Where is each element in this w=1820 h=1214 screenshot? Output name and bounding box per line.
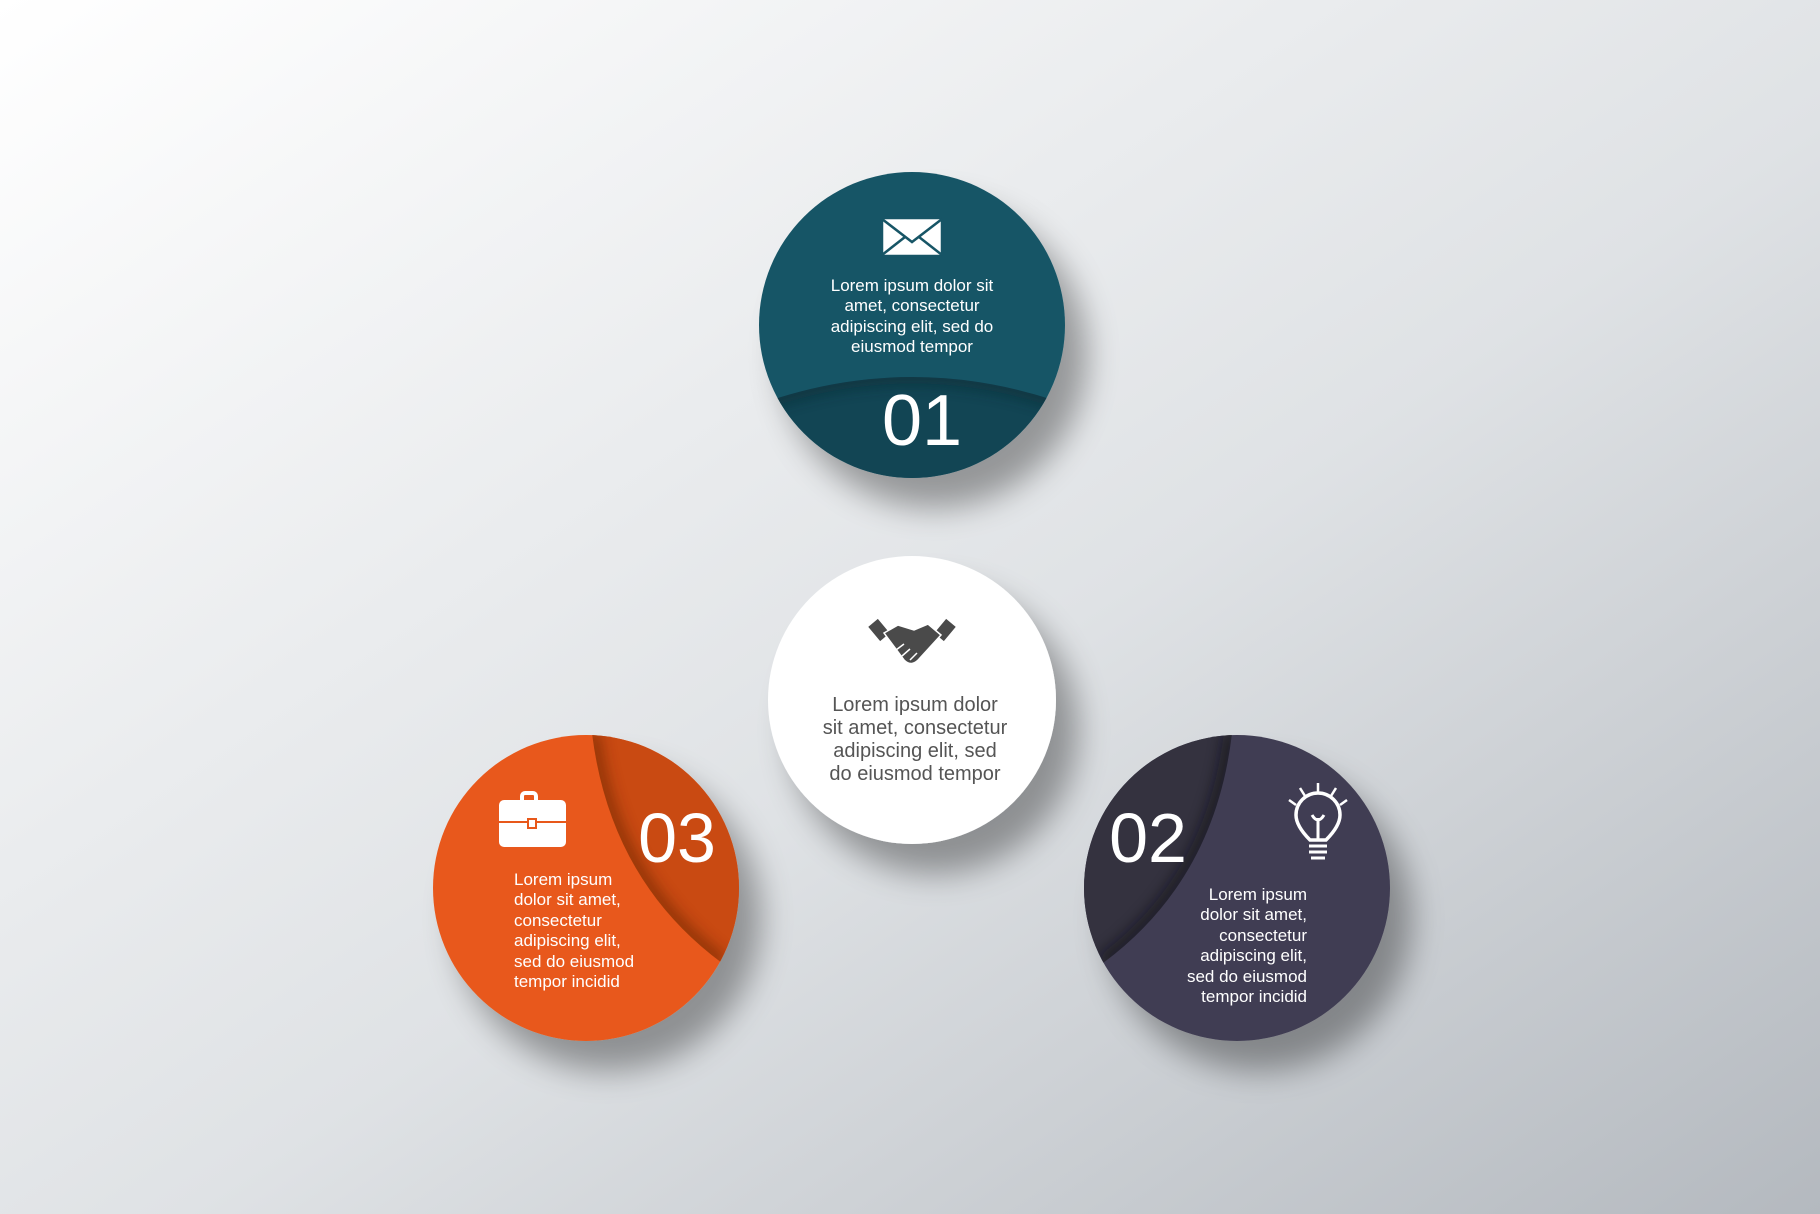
icon: handshake — [867, 618, 957, 664]
text block 01: amet, consectetur — [844, 296, 980, 315]
text block 03: tempor incidid — [514, 972, 620, 991]
number 03: 03 — [638, 799, 716, 877]
text block 02: adipiscing elit, — [1200, 946, 1307, 965]
text block 03: adipiscing elit, — [514, 931, 621, 950]
icon: briefcase — [499, 793, 566, 847]
panel: 02 — [1070, 720, 1390, 1041]
text block 03: consectetur — [514, 911, 602, 930]
text block center: do eiusmod tempor — [829, 763, 1001, 785]
panel: center — [768, 556, 1056, 844]
number 01: 01 — [882, 381, 962, 461]
text block 02: dolor sit amet, — [1200, 905, 1307, 924]
text block 01: adipiscing elit, sed do — [831, 317, 993, 336]
text block center: adipiscing elit, sed — [833, 740, 997, 762]
text block 02: sed do eiusmod — [1187, 967, 1307, 986]
text block 02: Lorem ipsum — [1209, 885, 1307, 904]
panel: 01 — [740, 172, 1080, 500]
text block 02: consectetur — [1219, 926, 1307, 945]
icon: light bulb — [1289, 783, 1347, 858]
text block 02: tempor incidid — [1201, 987, 1307, 1006]
text block 01: Lorem ipsum dolor sit — [831, 276, 994, 295]
text block 03: Lorem ipsum — [514, 870, 612, 889]
text block center: Lorem ipsum dolor — [832, 694, 998, 716]
text block 03: dolor sit amet, — [514, 890, 621, 909]
number 02: 02 — [1109, 799, 1187, 877]
icon: envelope — [882, 218, 942, 256]
text block center: sit amet, consectetur — [823, 717, 1008, 739]
text block 01: eiusmod tempor — [851, 337, 973, 356]
panel: 03 — [433, 720, 760, 1041]
text block 03: sed do eiusmod — [514, 952, 634, 971]
